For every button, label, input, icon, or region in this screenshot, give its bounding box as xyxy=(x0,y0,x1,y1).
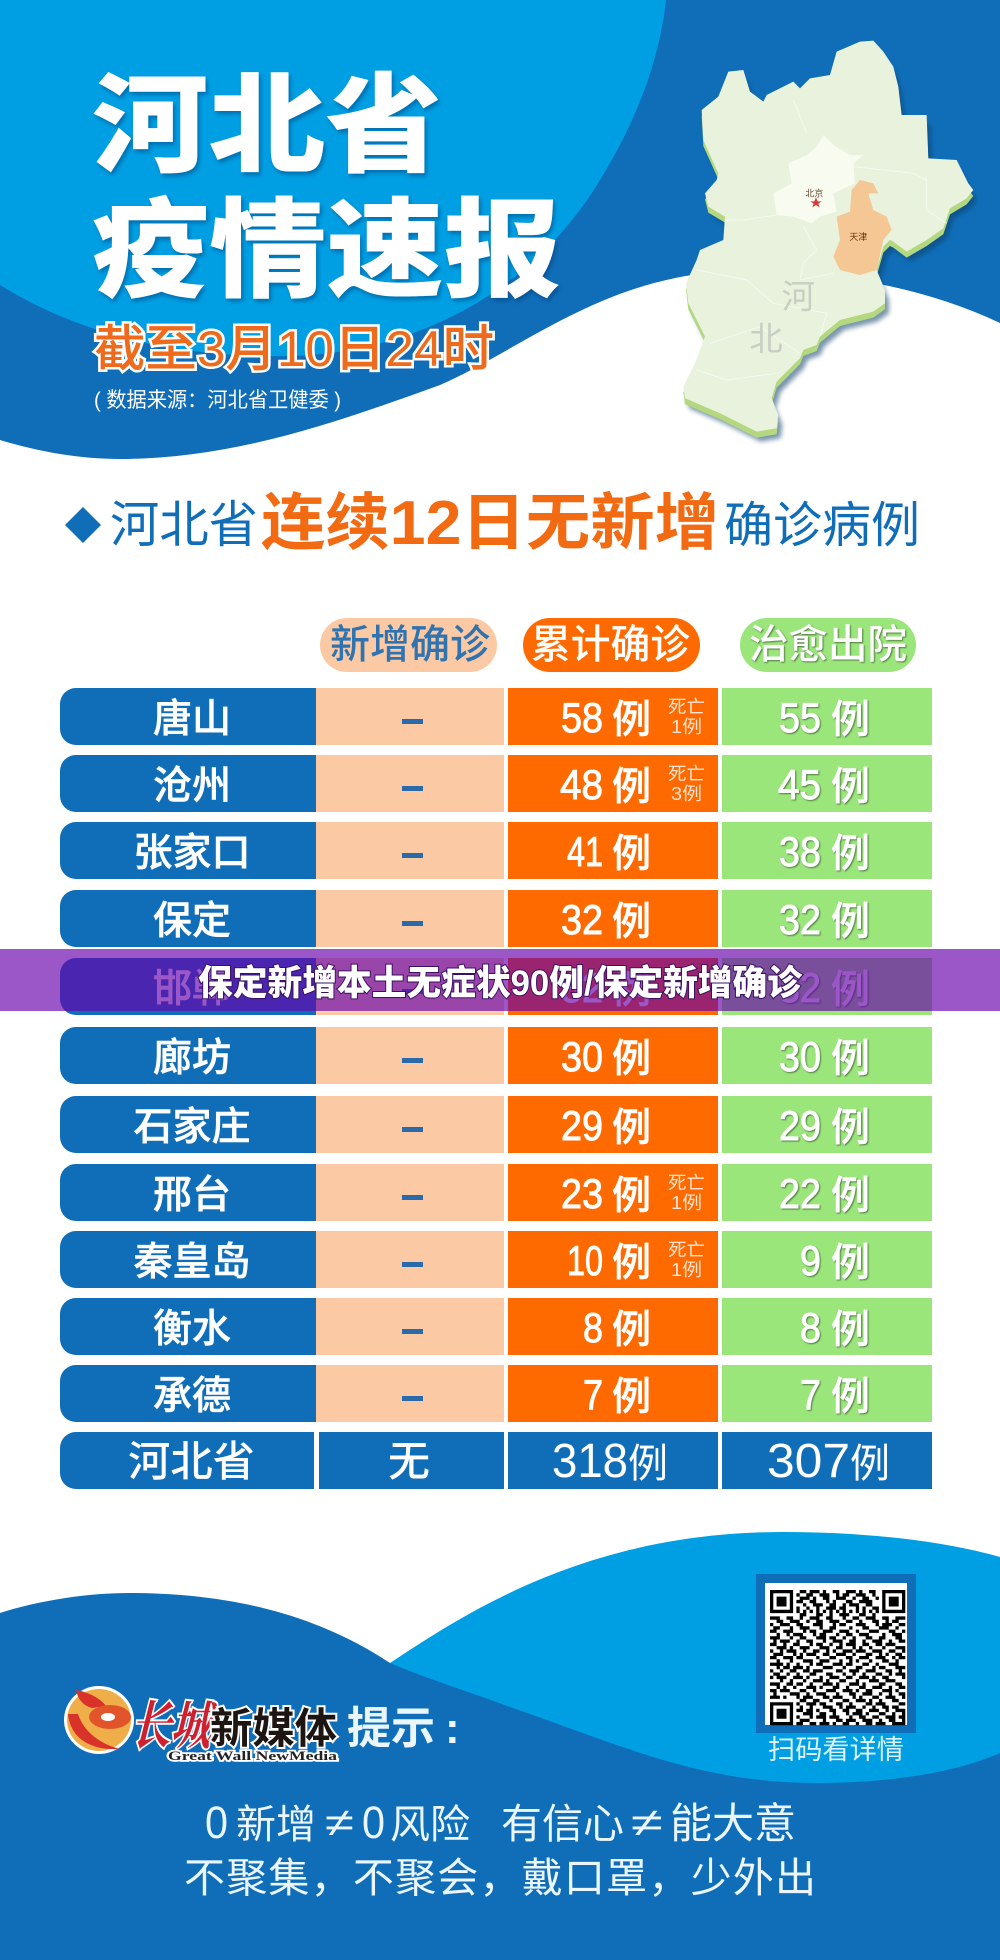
row: 廊坊: 廊坊 xyxy=(153,1037,231,1080)
row: 唐山: 唐山 xyxy=(153,698,231,741)
row: 石家庄: 石家庄 xyxy=(133,1106,251,1149)
data source note: ( 数据来源：河北省卫健委 ) xyxy=(94,389,341,412)
row: 秦皇岛: 例 xyxy=(612,1242,651,1285)
row: 邢台: 邢台 xyxy=(153,1174,231,1217)
row: 衡水: 8 xyxy=(800,1304,821,1351)
row: 邢台: 例 xyxy=(831,1175,870,1218)
background: light blue bottom wave xyxy=(390,1532,1000,1783)
logo: Great Wall NewMedia xyxy=(64,1685,338,1763)
row: 秦皇岛: 1例 xyxy=(671,1260,702,1280)
row: 唐山: 58 xyxy=(561,694,603,741)
row: 廊坊: 30 xyxy=(779,1033,821,1080)
row: total 河北省: 无 xyxy=(388,1438,430,1485)
row: 张家口: 41 xyxy=(567,828,603,875)
icon: diamond xyxy=(65,507,101,543)
row: 唐山: 死亡 xyxy=(668,697,705,717)
map of Hebei: 北京 xyxy=(805,188,823,199)
QR code xyxy=(756,1574,916,1733)
row: 沧州: 例 xyxy=(831,766,870,809)
row: 承德: 承德 xyxy=(153,1375,231,1418)
row: 保定: 32 xyxy=(561,896,603,943)
row: 邢台: 23 xyxy=(561,1170,603,1217)
overlay banner: 保定新增本土无症状90例/保定新增确诊 xyxy=(198,963,803,1003)
row: 石家庄 xyxy=(60,1096,932,1153)
wordmark: Great Wall NewMedia: Great Wall NewMedia xyxy=(168,1748,338,1763)
row: 石家庄: 29 xyxy=(779,1102,821,1149)
pill: new confirmed: 新增确诊 xyxy=(330,623,490,667)
row: 邢台: 1例 xyxy=(671,1193,702,1213)
row: 邯郸 xyxy=(60,958,932,1015)
row: 邯郸: 例 xyxy=(612,969,651,1012)
row: total 河北省: 例 xyxy=(850,1442,890,1486)
row: 秦皇岛: 死亡 xyxy=(668,1240,705,1260)
row: 邢台: 例 xyxy=(612,1175,651,1218)
row: total 河北省: 307 xyxy=(767,1435,850,1488)
row: 承德: 7 xyxy=(800,1371,821,1418)
row: total 河北省 xyxy=(60,1432,932,1489)
table header pills xyxy=(320,618,916,672)
row: 唐山 xyxy=(60,688,932,745)
row: 秦皇岛: 秦皇岛 xyxy=(133,1241,251,1284)
row: total 河北省: 例 xyxy=(628,1442,668,1486)
reminder line 1: 能大意 xyxy=(670,1800,796,1847)
row: 衡水: 衡水 xyxy=(153,1308,231,1351)
row: 秦皇岛: 例 xyxy=(831,1242,870,1285)
row: 邢台: 22 xyxy=(779,1170,821,1217)
date subtitle: 截至3月10日24时 xyxy=(94,321,494,377)
row: 廊坊: 30 xyxy=(561,1033,603,1080)
row: 沧州: 死亡 xyxy=(668,764,705,784)
row: 邯郸: 32 xyxy=(561,964,603,1011)
row: 衡水 xyxy=(60,1298,932,1355)
row: 唐山: 例 xyxy=(612,699,651,742)
reminder line 1: 0 xyxy=(362,1797,385,1848)
heading: tip: 提示 xyxy=(347,1704,435,1753)
row: 唐山: 例 xyxy=(831,699,870,742)
map of Hebei xyxy=(683,41,977,442)
row: 沧州: 48 xyxy=(560,761,603,808)
section heading xyxy=(65,489,920,558)
row: 张家口 xyxy=(60,822,932,879)
QR caption: 扫码看详情 xyxy=(768,1735,904,1765)
row: 衡水: 8 xyxy=(583,1304,603,1351)
row: 衡水: 例 xyxy=(612,1309,651,1352)
reminder line 2: 不聚集，不聚会，戴口罩，少外出 xyxy=(184,1855,816,1901)
reminder line 1: 风险 xyxy=(390,1803,470,1847)
map of Hebei: 北 xyxy=(749,322,783,359)
row: 石家庄: 29 xyxy=(561,1102,603,1149)
map of Hebei: 天津 xyxy=(849,232,867,242)
row: 承德 xyxy=(60,1365,932,1422)
icon: swirl xyxy=(64,1686,134,1754)
heading: tip: : xyxy=(445,1704,460,1753)
row: 保定: 保定 xyxy=(153,900,231,943)
reminder line 1: 新增 xyxy=(236,1803,316,1847)
row: 承德: 例 xyxy=(612,1376,651,1419)
row: 廊坊: 例 xyxy=(831,1038,870,1081)
row: 保定: 32 xyxy=(779,896,821,943)
row: 唐山: 1例 xyxy=(671,717,702,737)
row: 张家口: 例 xyxy=(831,833,870,876)
row: 廊坊: 例 xyxy=(612,1038,651,1081)
row: 邢台: 死亡 xyxy=(668,1173,705,1193)
row: 沧州: 3例 xyxy=(671,784,702,804)
background: dark blue header xyxy=(0,0,1000,600)
row: 石家庄: 例 xyxy=(831,1107,870,1150)
row: 邢台 xyxy=(60,1164,932,1221)
row: 沧州 xyxy=(60,755,932,812)
pill: cumulative confirmed: 累计确诊 xyxy=(531,623,690,667)
row: 衡水: 例 xyxy=(831,1309,870,1352)
row: total 河北省: 318 xyxy=(552,1435,628,1488)
wordmark: 新媒体: 新媒体 xyxy=(210,1705,337,1752)
row: 廊坊 xyxy=(60,1027,932,1084)
overlay banner xyxy=(0,949,1000,1011)
row: 邯郸: 邯郸 xyxy=(153,968,231,1011)
title: 疫情速报 xyxy=(92,190,561,311)
row: 张家口: 张家口 xyxy=(133,832,251,875)
reminder line 1: 有信心 xyxy=(501,1801,624,1847)
row: 邯郸: 32 xyxy=(779,964,821,1011)
row: 保定: 例 xyxy=(831,901,870,944)
row: 邯郸: 例 xyxy=(831,969,870,1012)
background: light blue circle xyxy=(0,0,666,356)
wordmark: 长城: 长城 xyxy=(126,1685,225,1760)
row: 秦皇岛: 9 xyxy=(800,1237,821,1284)
row: 张家口: 38 xyxy=(779,828,821,875)
background: dark blue bottom wave xyxy=(0,1593,1000,1960)
row: 石家庄: 例 xyxy=(612,1107,651,1150)
row: 张家口: 例 xyxy=(612,833,651,876)
row: 秦皇岛 xyxy=(60,1231,932,1288)
row: 沧州: 沧州 xyxy=(153,765,231,808)
row: 沧州: 例 xyxy=(612,766,651,809)
row: 承德: 7 xyxy=(583,1371,603,1418)
row: 保定: 例 xyxy=(612,901,651,944)
section heading: 河北省 xyxy=(110,497,258,553)
row: 唐山: 55 xyxy=(779,694,821,741)
row: 保定 xyxy=(60,890,932,947)
table xyxy=(60,688,932,1489)
row: total 河北省: 河北省 xyxy=(128,1438,255,1485)
row: 沧州: 45 xyxy=(778,761,821,808)
title xyxy=(92,65,561,311)
map of Hebei: 河 xyxy=(782,279,815,316)
pill: recovered: 治愈出院 xyxy=(749,623,907,667)
section heading: 确诊病例 xyxy=(724,499,920,553)
reminder line 1: ≠ xyxy=(631,1801,663,1845)
reminder line 1 xyxy=(205,1797,796,1848)
reminder line 1: ≠ xyxy=(325,1801,354,1845)
title: 河北省 xyxy=(92,65,442,186)
reminder line 1: 0 xyxy=(205,1797,228,1848)
row: 秦皇岛: 10 xyxy=(567,1237,603,1284)
row: 承德: 例 xyxy=(831,1376,870,1419)
section heading: 连续12日无新增 xyxy=(261,489,719,558)
